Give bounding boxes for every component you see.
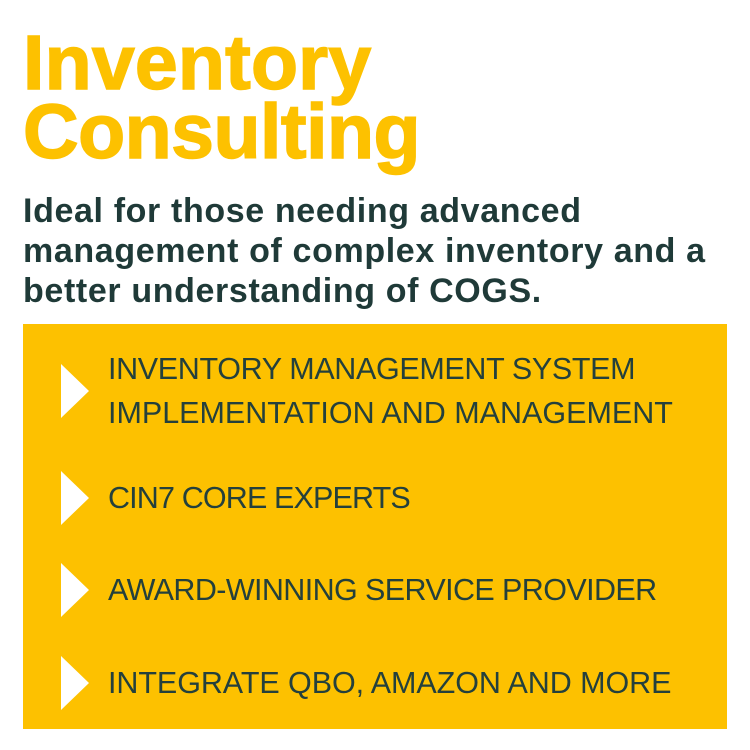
subtitle: better understanding of COGS.: [23, 272, 542, 310]
list item: cin7: CIN7 CORE EXPERTS: [108, 481, 410, 515]
icon: arrow 1: [61, 364, 89, 418]
list item: integrate: INTEGRATE QBO, AMAZON AND MORE: [108, 666, 671, 700]
subtitle: Ideal for those needing advanced: [23, 192, 582, 230]
list item: inventory management: IMPLEMENTATION AND MANAGEMENT: [108, 396, 673, 430]
list item: inventory management: [108, 352, 673, 430]
list item: inventory management: INVENTORY MANAGEMENT SYSTEM: [108, 352, 635, 386]
subtitle: management of complex inventory and a: [23, 232, 706, 270]
title: Consulting: [23, 89, 420, 175]
title: Inventory: [23, 20, 371, 106]
list item: award: AWARD-WINNING SERVICE PROVIDER: [108, 573, 657, 607]
subtitle: [23, 192, 706, 310]
panel: service list: [23, 324, 727, 729]
icon: arrow 4: [61, 656, 89, 710]
title: [23, 20, 420, 176]
icon: arrow 3: [61, 563, 89, 617]
icon: arrow 2: [61, 471, 89, 525]
